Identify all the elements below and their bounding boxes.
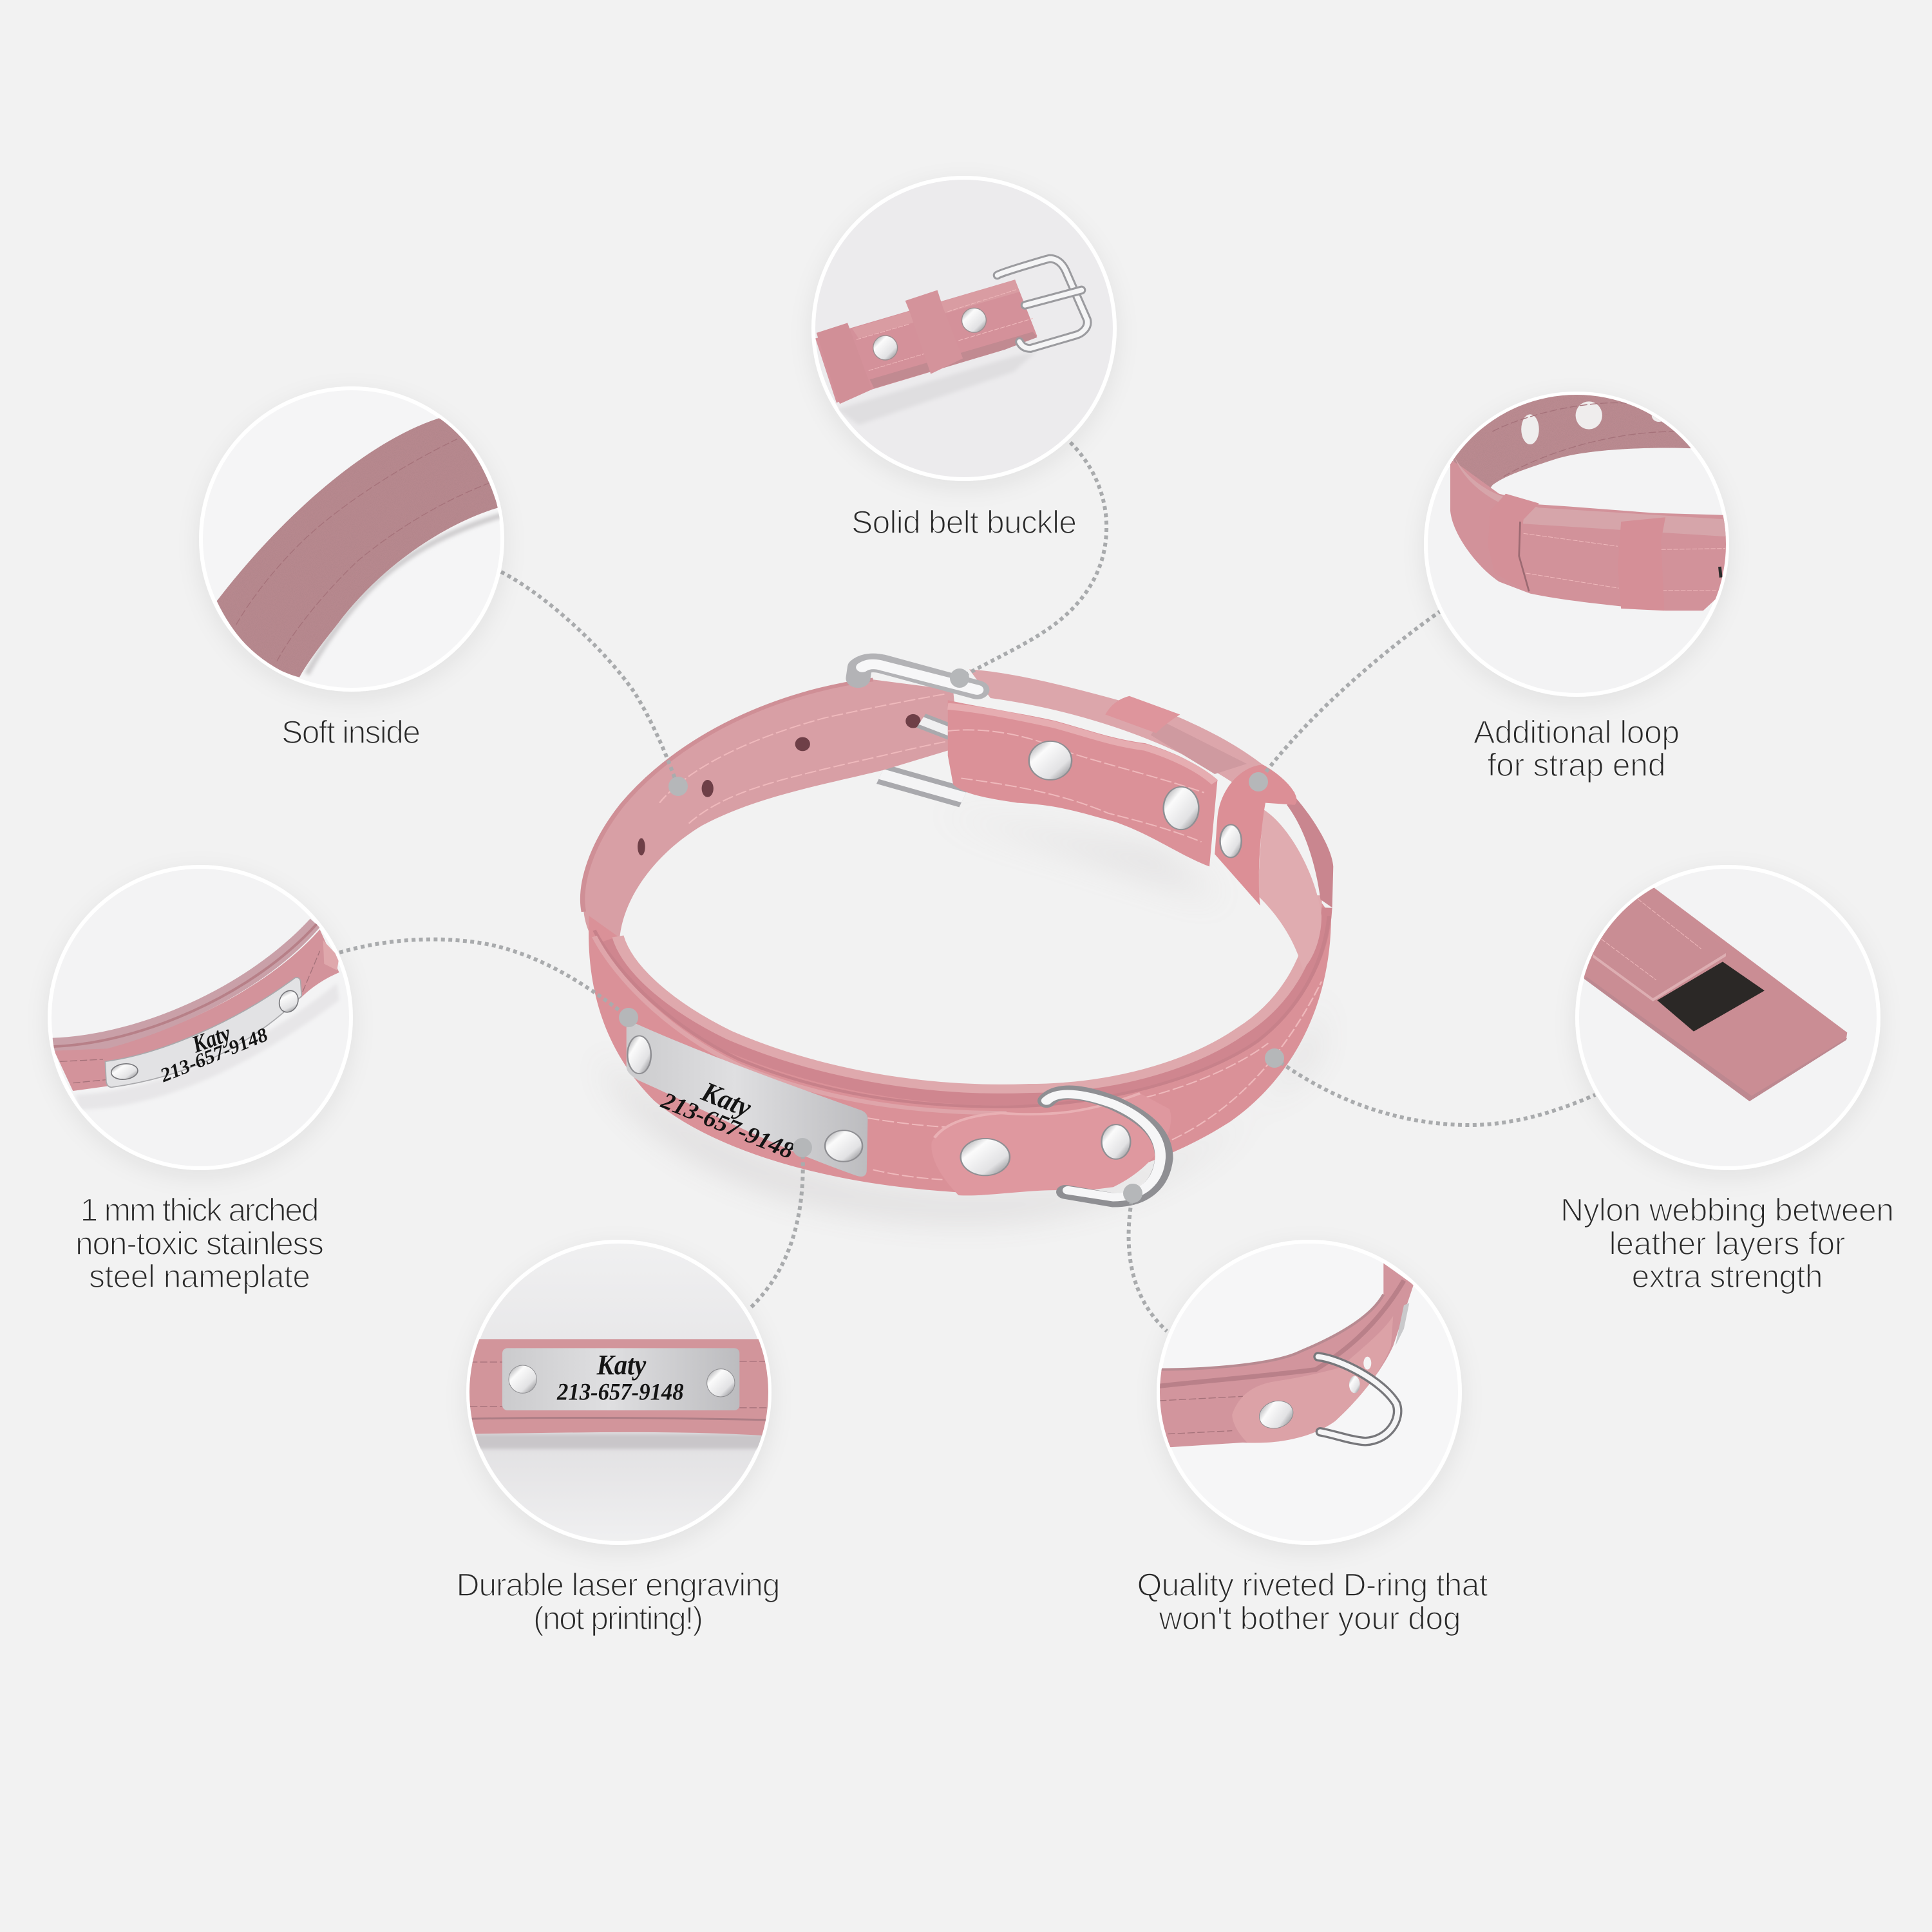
label: arched nameplate: 1 mm thick arched xyxy=(80,1192,319,1228)
keeper edge xyxy=(323,940,339,971)
panel: arched nameplate detail: 213-657-9148 xyxy=(156,1023,271,1086)
label: laser engraving: Durable laser engraving xyxy=(456,1567,781,1603)
left keeper loop xyxy=(1498,493,1539,523)
label: laser engraving: (not printing!) xyxy=(533,1600,703,1636)
label: nylon webbing: extra strength xyxy=(1632,1258,1823,1294)
plate rivets xyxy=(509,1365,536,1393)
back strap top strip xyxy=(969,669,1295,793)
belt holes xyxy=(638,714,968,855)
engraved text: Katy xyxy=(188,1020,234,1059)
suede inner strap xyxy=(583,679,958,953)
dotted connector: nameplate xyxy=(339,940,629,1018)
panel: laser engraving detail xyxy=(466,1242,775,1543)
label: additional loop xyxy=(1473,714,1680,783)
buckle rear bar xyxy=(881,774,964,797)
strap xyxy=(466,1339,773,1436)
label: soft inside: Soft inside xyxy=(281,714,421,750)
buckle prong xyxy=(921,721,953,733)
panel: solid belt buckle detail xyxy=(813,178,1115,479)
bottom leather layer xyxy=(1578,887,1847,1101)
panel: nylon webbing detail xyxy=(1577,867,1879,1168)
front collar body xyxy=(589,895,1331,1193)
nameplate xyxy=(627,1023,867,1177)
dotted connector: D-ring xyxy=(1129,1193,1167,1331)
right keeper loop xyxy=(1618,517,1665,611)
collar drop shadow xyxy=(599,811,1327,1217)
steel plate xyxy=(105,978,301,1087)
front strap xyxy=(1450,459,1727,611)
rough upper layer xyxy=(53,919,320,1051)
panel: laser engraving detail: 213-657-9148 xyxy=(556,1379,684,1405)
rivet tab xyxy=(1232,1316,1393,1443)
suede back xyxy=(1453,395,1691,488)
keeper loop xyxy=(1105,696,1180,733)
right suede end xyxy=(1258,809,1321,969)
label: riveted D-ring: Quality riveted D-ring that xyxy=(1137,1567,1488,1603)
nameplate engraving: Katy: Katy xyxy=(697,1075,756,1124)
nameplate engraving: phone: 213-657-9148 xyxy=(657,1087,798,1164)
strap xyxy=(1157,1264,1414,1447)
suede stitching xyxy=(659,694,945,803)
steel plate xyxy=(502,1348,739,1410)
label: solid belt buckle: Solid belt buckle xyxy=(851,504,1077,540)
dotted connector: laser engraving xyxy=(749,1148,803,1309)
panel: additional loop detail xyxy=(1426,386,1727,695)
panel: soft inside detail xyxy=(201,388,502,690)
end loop with rivet xyxy=(1215,764,1297,905)
label: riveted D-ring xyxy=(1137,1567,1488,1636)
strap rivets xyxy=(961,308,986,332)
panel: arched nameplate detail xyxy=(50,867,351,1168)
black nylon webbing xyxy=(1657,961,1765,1032)
main collar illustration xyxy=(583,663,1333,1217)
dotted connector: belt buckle xyxy=(960,442,1106,678)
panel: riveted D-ring detail xyxy=(1157,1242,1460,1543)
engraved text: Katy xyxy=(596,1349,647,1381)
buckle frame xyxy=(998,259,1088,348)
buckle strap xyxy=(815,279,1037,402)
riveted D-ring tab xyxy=(931,1094,1171,1195)
callout markers xyxy=(619,668,1284,1203)
suede band xyxy=(217,418,498,677)
label: nylon webbing xyxy=(1560,1192,1894,1294)
buckle roller xyxy=(858,663,977,690)
dotted connector: nylon webbing xyxy=(1274,1058,1595,1125)
upper smooth layer xyxy=(606,907,1324,1099)
label: arched nameplate xyxy=(75,1192,324,1294)
label: riveted D-ring: won't bother your dog xyxy=(1158,1600,1461,1636)
strap loops xyxy=(905,290,963,374)
front stitching xyxy=(867,1118,953,1128)
rivets xyxy=(627,1036,1130,1175)
rough edge rim xyxy=(618,895,1316,1089)
top leather layer xyxy=(1578,887,1727,1001)
buckle-end tab xyxy=(948,700,1217,867)
label: arched nameplate: steel nameplate xyxy=(89,1258,310,1294)
tab rivets xyxy=(1029,741,1198,829)
label: arched nameplate: non-toxic stainless xyxy=(75,1226,324,1262)
label: additional loop: Additional loop xyxy=(1473,714,1680,750)
label: nylon webbing: leather layers for xyxy=(1609,1226,1846,1262)
pink strap xyxy=(53,929,339,1091)
dotted connector: additional loop xyxy=(1258,611,1441,782)
D-ring metal xyxy=(1318,1357,1397,1441)
label: laser engraving xyxy=(456,1567,781,1636)
label: additional loop: for strap end xyxy=(1488,747,1665,783)
label: nylon webbing: Nylon webbing between xyxy=(1560,1192,1894,1228)
dotted connector: soft inside xyxy=(501,572,678,788)
D-ring xyxy=(1046,1092,1164,1200)
